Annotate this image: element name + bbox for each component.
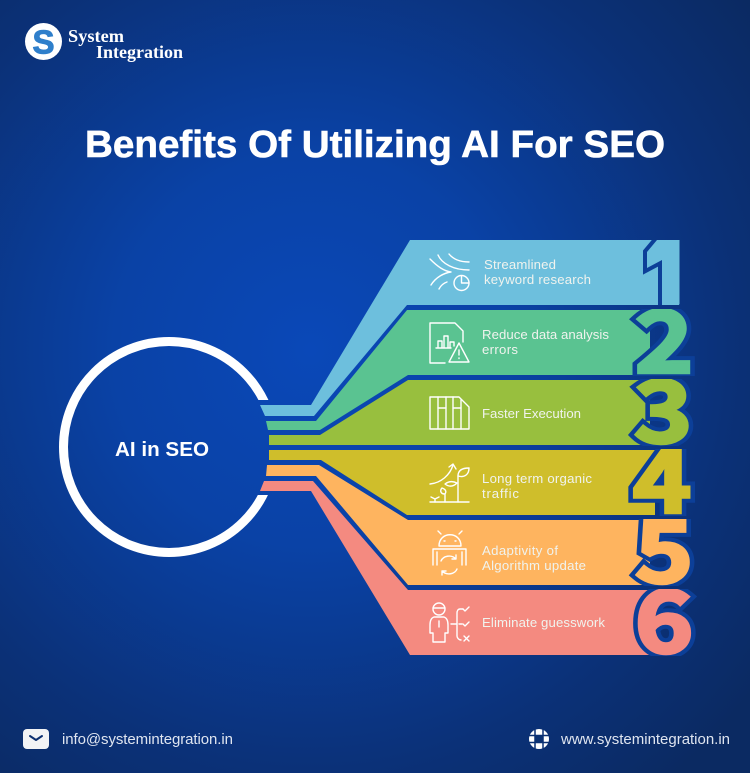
label: Algorithm update bbox=[482, 558, 586, 573]
number 4: 4 bbox=[633, 413, 691, 538]
circle: AI in SEO bbox=[64, 342, 274, 552]
logo wordmark bbox=[68, 26, 183, 62]
number 5: 5 bbox=[635, 483, 693, 608]
band 2: Reduce data analysis errors bbox=[266, 309, 695, 430]
circle: AI in SEO: AI in SEO bbox=[115, 439, 209, 461]
label: Faster Execution bbox=[482, 406, 581, 421]
icon: envelope bbox=[23, 729, 49, 749]
icon: document with chart and warning bbox=[430, 323, 469, 363]
logo mark bbox=[25, 23, 62, 60]
number 2 bbox=[629, 309, 695, 376]
title: Benefits Of Utilizing AI For SEO bbox=[85, 124, 665, 166]
number 2: 2 bbox=[635, 273, 693, 398]
label: Reduce data analysis bbox=[482, 327, 609, 342]
logo wordmark: System bbox=[68, 26, 124, 46]
label: errors bbox=[482, 342, 518, 357]
number 4 bbox=[628, 449, 695, 516]
label: traffic bbox=[482, 486, 519, 501]
icon: columns bbox=[430, 397, 469, 429]
number 1 bbox=[643, 240, 680, 305]
band 3: Faster Execution bbox=[269, 379, 694, 446]
icon: growth plant bbox=[430, 464, 469, 502]
footer: website: www.systemintegration.in bbox=[560, 731, 730, 748]
number 2: 2 bbox=[635, 273, 693, 398]
number 6: 6 bbox=[635, 553, 693, 678]
label: Adaptivity of bbox=[482, 543, 558, 558]
band 1: Streamlined keyword research bbox=[260, 240, 680, 416]
logo bbox=[25, 23, 183, 62]
label: Streamlined bbox=[484, 257, 556, 272]
number 6: 6 bbox=[635, 553, 693, 678]
logo mark: S bbox=[32, 24, 55, 60]
icon: person with choices bbox=[430, 603, 469, 642]
icon: android with refresh bbox=[433, 531, 466, 575]
number 1: 1 bbox=[645, 202, 695, 328]
band 4: Long term organic traffic bbox=[269, 449, 695, 516]
band 5: Adaptivity of Algorithm update bbox=[266, 465, 694, 586]
label: Long term organic bbox=[482, 471, 592, 486]
band 6: Eliminate guesswork bbox=[260, 481, 697, 656]
number 6 bbox=[633, 589, 697, 656]
footer: email bbox=[23, 729, 233, 749]
number 5 bbox=[628, 519, 694, 586]
footer: email: info@systemintegration.in bbox=[62, 731, 233, 748]
label: Eliminate guesswork bbox=[482, 615, 605, 630]
label: keyword research bbox=[484, 272, 591, 287]
number 5: 5 bbox=[635, 483, 693, 608]
number 4: 4 bbox=[633, 413, 691, 538]
icon: globe bbox=[529, 729, 549, 749]
logo wordmark: Integration bbox=[96, 42, 183, 62]
number 3 bbox=[628, 379, 694, 446]
icon: wind and pie chart bbox=[430, 254, 469, 290]
number 3: 3 bbox=[634, 343, 692, 468]
number 3: 3 bbox=[634, 343, 692, 468]
